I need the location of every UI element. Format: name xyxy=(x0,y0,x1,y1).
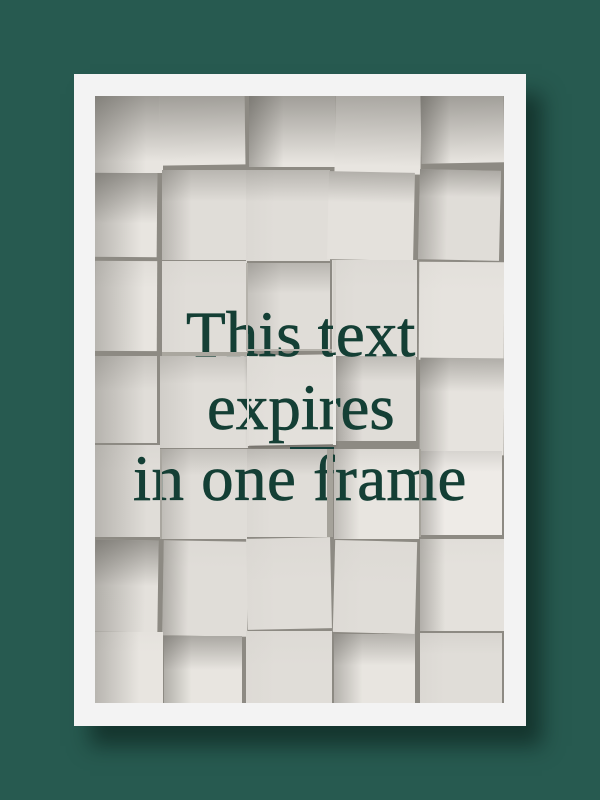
tile row 1 xyxy=(95,96,504,175)
panel: paper tile wall xyxy=(95,96,504,703)
line 3: in one frame xyxy=(133,443,467,515)
tile row 6 xyxy=(95,537,504,637)
headline text xyxy=(133,310,467,515)
line 2: expires xyxy=(207,372,395,444)
tile row 2 xyxy=(95,169,501,261)
picture frame xyxy=(74,74,526,726)
line 1: This text xyxy=(186,299,415,371)
tile row 7 xyxy=(95,631,502,703)
tile row 3 xyxy=(95,260,504,360)
tile edges cutting through text xyxy=(160,263,421,539)
tile row 5 xyxy=(95,445,502,539)
tile row 4 xyxy=(95,354,504,456)
